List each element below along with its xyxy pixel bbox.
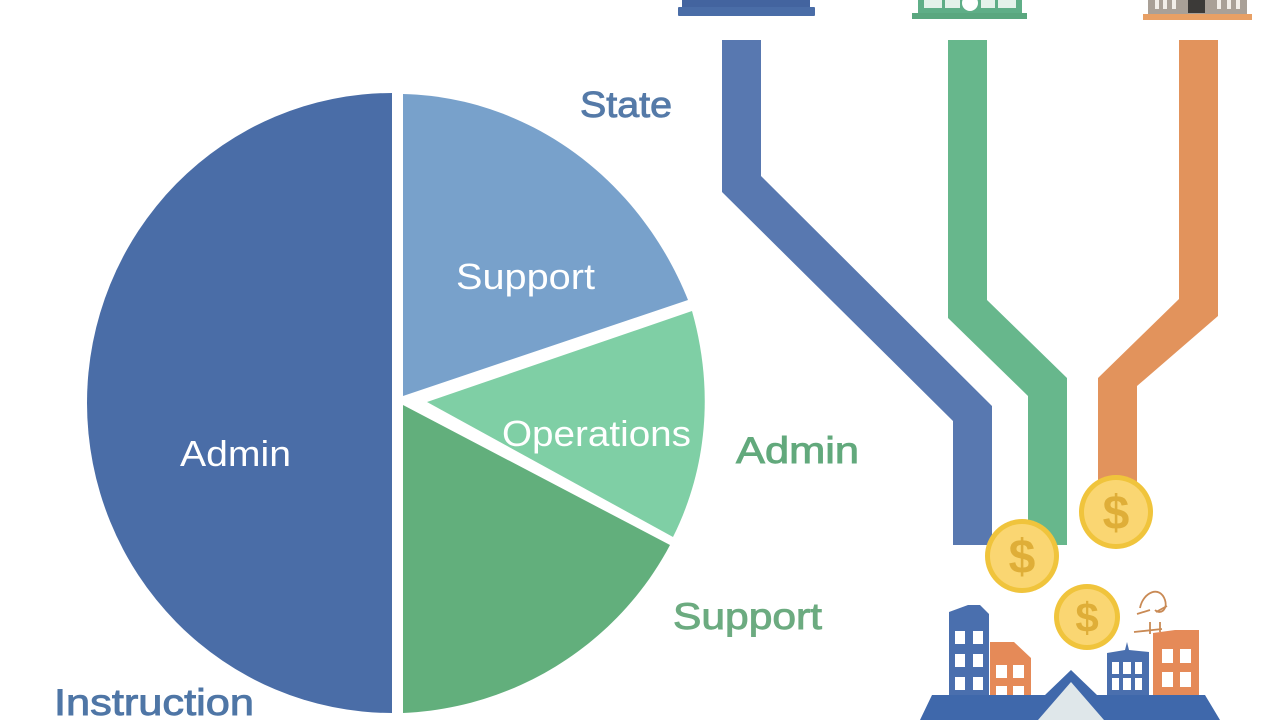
icon: local building	[1143, 0, 1252, 20]
roof	[920, 670, 1220, 720]
icon: town with school	[920, 592, 1220, 720]
pie slice: Admin	[87, 93, 392, 713]
school gable	[1038, 682, 1104, 720]
orange building left	[990, 642, 1031, 700]
label: Admin: Admin	[180, 433, 291, 474]
icon: state building	[912, 0, 1027, 19]
heading: Support: Support	[673, 596, 823, 637]
icon: coin right	[1079, 475, 1153, 549]
icon: coin left: $	[1009, 531, 1036, 584]
label: Support: Support	[456, 256, 595, 297]
arrow: orange funding stream	[1098, 40, 1218, 490]
pie slice: green	[403, 405, 670, 713]
icon: federal building	[678, 0, 815, 16]
icon: coin right: $	[1103, 487, 1130, 540]
smoke	[1134, 592, 1167, 634]
arrow: blue funding stream	[722, 40, 992, 545]
orange building right	[1153, 630, 1199, 700]
label: Operations: Operations	[502, 413, 691, 454]
heading: State: State	[580, 84, 672, 125]
pie slice: Operations	[427, 311, 705, 537]
icon: coin bottom	[1054, 584, 1120, 650]
icon: coin left	[985, 519, 1059, 593]
arrow: green funding stream	[948, 40, 1067, 545]
blue tower	[949, 605, 989, 700]
icon: coin bottom: $	[1075, 594, 1099, 641]
blue building right	[1107, 642, 1149, 700]
heading: Admin: Admin	[736, 430, 859, 471]
pie chart	[87, 93, 705, 713]
pie slice: Support	[403, 94, 688, 396]
